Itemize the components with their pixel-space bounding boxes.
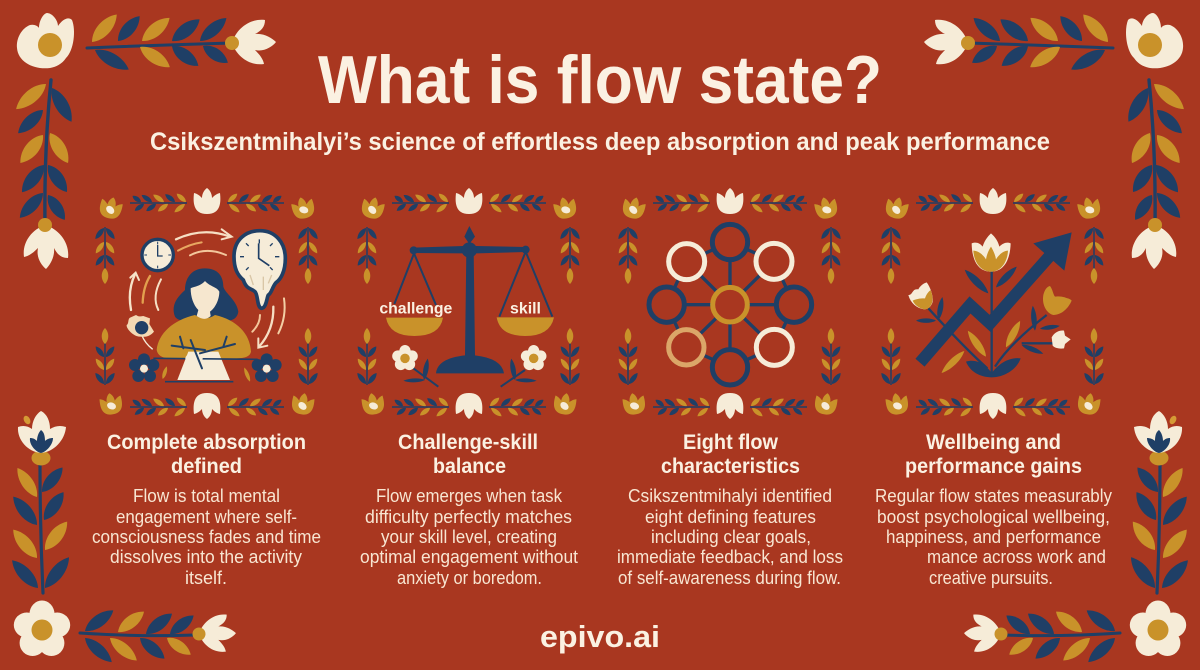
heading 3: characteristics <box>661 455 800 478</box>
scale labels: skill <box>510 300 541 317</box>
scale labels <box>379 300 541 317</box>
body 1: dissolves into the activity <box>110 546 303 567</box>
decoration: bottom-left floral corner <box>7 411 236 666</box>
body 4: happiness, and performance <box>886 526 1101 547</box>
body 3 <box>617 485 843 588</box>
floral frame 4 <box>879 188 1106 419</box>
body 2: difficulty perfectly matches <box>365 506 572 527</box>
panel: complete absorption <box>93 188 320 419</box>
floral frame 2 <box>355 188 582 419</box>
body 2: your skill level, creating <box>381 526 557 547</box>
footer brand: epivo.ai <box>540 619 660 654</box>
subtitle: Csikszentmihalyi’s science of effortless deep absorption and peak performance <box>150 128 1050 156</box>
body 1: Flow is total mental <box>133 485 280 506</box>
illustration: eight-ring network <box>649 224 812 385</box>
panel: challenge-skill balance <box>355 188 582 419</box>
illustration: rising arrow with flowers <box>908 232 1072 377</box>
illustration: person with melting clocks <box>127 229 285 382</box>
body 2: anxiety or boredom. <box>397 567 542 588</box>
body 3: eight defining features <box>645 506 816 527</box>
body 3: including clear goals, <box>651 526 811 547</box>
heading 1: Complete absorption <box>107 431 306 454</box>
heading 3 <box>661 431 800 478</box>
scale labels: challenge <box>379 300 452 317</box>
body 1 <box>92 485 321 588</box>
panel: eight flow characteristics <box>616 188 843 419</box>
heading 2: balance <box>433 455 506 478</box>
heading 2 <box>398 431 538 478</box>
body 3: immediate feedback, and loss <box>617 546 843 567</box>
decoration: top-left floral corner <box>12 10 276 269</box>
decoration: bottom-right floral corner <box>964 411 1193 666</box>
heading 1 <box>107 431 306 478</box>
panel: wellbeing and performance gains <box>879 188 1106 419</box>
body 3: of self-awareness during flow. <box>618 567 841 588</box>
illustration: balance scale <box>379 226 554 387</box>
body 1: itself. <box>185 567 227 588</box>
floral frame 1 <box>93 188 320 419</box>
heading 4: Wellbeing and <box>926 431 1061 454</box>
heading 3: Eight flow <box>683 431 779 454</box>
body 4: creative pursuits. <box>929 567 1053 588</box>
floral frame 3 <box>616 188 843 419</box>
body 1: consciousness fades and time <box>92 526 321 547</box>
body 2: optimal engagement without <box>360 546 578 567</box>
body 4: Regular flow states measurably <box>875 485 1113 506</box>
body 1: engagement where self- <box>116 506 297 527</box>
heading 2: Challenge-skill <box>398 431 538 454</box>
body 4 <box>875 485 1113 588</box>
title: What is flow state? <box>318 42 882 118</box>
heading 4 <box>905 431 1082 478</box>
body 3: Csikszentmihalyi identified <box>628 485 832 506</box>
body 2: Flow emerges when task <box>376 485 563 506</box>
heading 4: performance gains <box>905 455 1082 478</box>
body 4: mance across work and <box>927 546 1106 567</box>
body 4: boost psychological wellbeing, <box>877 506 1110 527</box>
body 2 <box>360 485 578 588</box>
decoration: top-right floral corner <box>924 10 1188 269</box>
heading 1: defined <box>171 455 242 478</box>
